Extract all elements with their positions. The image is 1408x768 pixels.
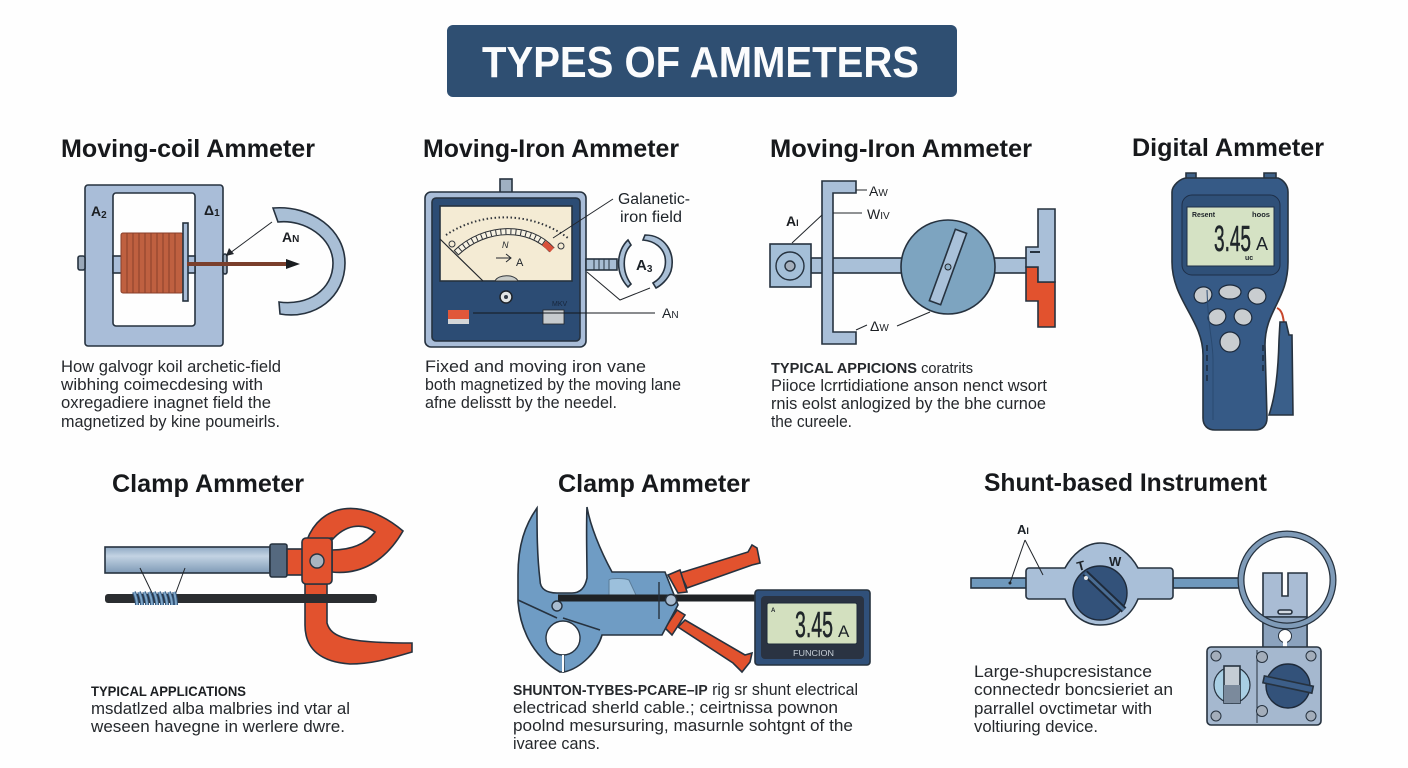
description text: How galvogr koil archetic-field xyxy=(61,358,281,376)
description text: Piioce lcrrtidiatione anson nenct wsort xyxy=(771,377,1047,395)
description text: afne delisstt by the needel. xyxy=(425,394,617,412)
description text: magnetized by kine poumeirls. xyxy=(61,413,280,431)
diagram: clamp meter with display: 3.45 xyxy=(795,604,833,645)
diagram: clamp meter with display: A xyxy=(838,622,850,641)
diagram: orange clamp on wire xyxy=(105,508,412,664)
description text: weseen havegne in werlere dwre. xyxy=(90,718,345,736)
diagram: iron vane mechanism: AW xyxy=(869,183,888,199)
description text: wibhing coimecdesing with xyxy=(60,376,263,394)
diagram: analog meter: MKV xyxy=(552,301,568,308)
heading: Clamp Ammeter xyxy=(558,470,750,498)
description text xyxy=(974,663,1173,736)
diagram: shunt instrument xyxy=(971,522,1333,725)
diagram: iron vane mechanism: AI xyxy=(786,213,799,229)
diagram: moving-coil mechanism: A xyxy=(91,203,101,219)
description text xyxy=(771,361,1047,431)
panel: clamp ammeter (digital clamp) xyxy=(513,470,870,753)
device: handheld digital meter: uc xyxy=(1245,255,1253,262)
diagram: shunt instrument: T xyxy=(1075,557,1087,574)
diagram: moving-coil mechanism: AN xyxy=(282,229,299,245)
device: handheld digital meter xyxy=(1172,173,1293,430)
diagram: analog meter: A xyxy=(636,257,647,274)
diagram: moving-coil mechanism: 2 xyxy=(101,210,107,221)
diagram: analog meter: 3 xyxy=(647,264,653,275)
diagram: moving-coil mechanism: Δ xyxy=(204,202,214,218)
panel: digital ammeter xyxy=(1132,134,1324,430)
diagram: clamp meter with display: A xyxy=(771,608,776,614)
description text: Fixed and moving iron vane xyxy=(425,358,646,376)
description text: ivaree cans. xyxy=(513,735,600,753)
description text: electricad sherld cable.; ceirtnissa pownon xyxy=(513,699,838,717)
description text xyxy=(513,681,858,753)
panel: clamp ammeter (orange clamp) xyxy=(90,470,412,736)
title banner: TYPES OF AMMETERS xyxy=(482,38,919,87)
diagram: analog meter: A xyxy=(516,257,524,269)
diagram: clamp meter with display: FUNCION xyxy=(793,648,834,658)
description text: Large-shupcresistance xyxy=(974,663,1152,681)
heading: Moving-Iron Ammeter xyxy=(770,135,1032,163)
heading: Moving-Iron Ammeter xyxy=(423,135,679,163)
panel: moving-iron ammeter (vane diagram) xyxy=(770,135,1055,431)
diagram: analog meter xyxy=(425,179,690,347)
diagram: analog meter: Galanetic- xyxy=(618,191,690,208)
heading: Digital Ammeter xyxy=(1132,134,1324,162)
title banner xyxy=(447,25,957,97)
device: handheld digital meter: 3.45 xyxy=(1214,218,1251,259)
description text: TYPICAL APPLICATIONS xyxy=(91,683,246,699)
device: handheld digital meter: Resent xyxy=(1192,212,1216,219)
description text xyxy=(60,358,281,431)
description text xyxy=(425,358,681,412)
description text: both magnetized by the moving lane xyxy=(425,376,681,394)
diagram: clamp meter with display xyxy=(518,507,870,672)
description text: oxregadiere inagnet field the xyxy=(61,394,271,412)
panel: moving-coil ammeter xyxy=(60,135,345,431)
diagram: moving-coil mechanism xyxy=(78,185,345,346)
description text: connectedr boncsieriet an xyxy=(974,681,1173,699)
diagram: moving-coil mechanism: 1 xyxy=(214,208,220,219)
panel: shunt-based instrument xyxy=(971,469,1333,736)
diagram: analog meter: AN xyxy=(662,305,679,321)
heading: Moving-coil Ammeter xyxy=(61,135,315,163)
diagram: analog meter: N xyxy=(502,240,509,250)
device: handheld digital meter: hoos xyxy=(1252,212,1270,219)
description text: parrallel ovctimetar with xyxy=(974,700,1152,718)
diagram: shunt instrument: W xyxy=(1109,554,1122,569)
description text: the cureele. xyxy=(771,413,852,431)
description text xyxy=(90,683,350,736)
diagram: iron vane mechanism: ΔW xyxy=(870,318,889,334)
device: handheld digital meter: A xyxy=(1256,234,1268,254)
diagram: iron vane mechanism xyxy=(770,181,1055,344)
description text: poolnd mesursuring, masurnle sohtgnt of the xyxy=(513,717,853,735)
heading: Clamp Ammeter xyxy=(112,470,304,498)
diagram: analog meter: iron field xyxy=(620,209,682,226)
diagram: iron vane mechanism: WIV xyxy=(867,206,890,222)
description text: voltiuring device. xyxy=(974,718,1098,736)
heading: Shunt-based Instrument xyxy=(984,469,1268,497)
description text: SHUNTON-TYBES-PCARE–IP rig sr shunt electrical xyxy=(513,681,858,699)
description text: msdatlzed alba malbries ind vtar al xyxy=(91,700,350,718)
diagram: shunt instrument: AI xyxy=(1017,522,1029,537)
description text: rnis eolst anlogized by the bhe curnoe xyxy=(771,395,1046,413)
panel: moving-iron ammeter (analog meter) xyxy=(423,135,690,412)
description text: TYPICAL APPICIONS coratrits xyxy=(771,361,973,377)
